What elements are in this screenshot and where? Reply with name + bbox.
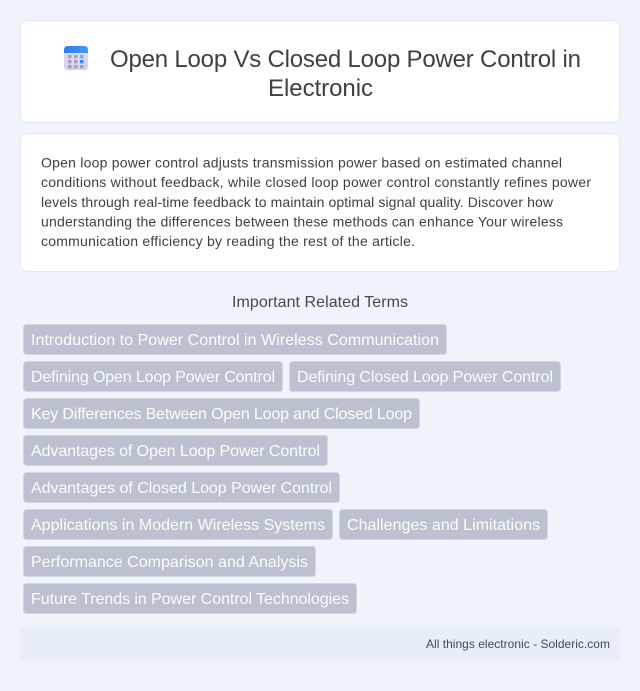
tag: advantages open loop: Advantages of Open Loop Power Control: [31, 443, 320, 460]
tag: key differences: Key Differences Between Open Loop and Closed Loop: [31, 406, 412, 423]
icon: calendar: [64, 46, 88, 70]
tag: introduction: [24, 324, 446, 354]
tag: future trends: [24, 584, 356, 614]
tag: advantages open loop: [24, 436, 328, 466]
panel: introduction: [20, 134, 620, 272]
panel: title card: [20, 20, 620, 122]
tag: defining closed loop: [290, 362, 560, 392]
text block: introduction: understanding the differences between these methods can enhance Your wireless: [41, 213, 563, 229]
heading: important related terms: Important Related Terms: [232, 294, 408, 311]
title: Electronic: [268, 75, 373, 102]
tag: introduction: Introduction to Power Control in Wireless Communication: [31, 332, 439, 349]
footer: [20, 627, 620, 661]
tag: performance comparison: Performance Comparison and Analysis: [31, 554, 308, 571]
tag: defining closed loop: Defining Closed Loop Power Control: [297, 369, 553, 386]
panel: related terms tags: [24, 324, 560, 614]
tag: applications: Applications in Modern Wireless Systems: [31, 517, 325, 534]
tag: future trends: Future Trends in Power Control Technologies: [31, 591, 349, 608]
tag: applications: [24, 510, 332, 540]
text block: introduction: [41, 155, 591, 249]
title: Open Loop Vs Closed Loop Power Control in: [110, 46, 581, 73]
tag: challenges: Challenges and Limitations: [347, 517, 540, 534]
text block: introduction: Open loop power control adjusts transmission power based on estimated channel: [41, 155, 562, 171]
tag: defining open loop: [24, 362, 282, 392]
tag: challenges: [340, 510, 548, 540]
title: [110, 46, 581, 102]
text block: introduction: levels through real-time feedback to maintain optimal signal quality. Discover how: [41, 194, 554, 210]
footer credit: All things electronic - Solderic.com: [426, 637, 610, 651]
text block: introduction: conditions without feedback, while closed loop power control constantly refines power: [41, 174, 591, 190]
tag: performance comparison: [24, 546, 316, 576]
tag: key differences: [24, 398, 420, 428]
text block: introduction: communication efficiency by reading the rest of the article.: [41, 233, 415, 249]
tag: advantages closed loop: [24, 472, 340, 502]
tag: defining open loop: Defining Open Loop Power Control: [31, 369, 275, 386]
tag: advantages closed loop: Advantages of Closed Loop Power Control: [31, 480, 332, 497]
